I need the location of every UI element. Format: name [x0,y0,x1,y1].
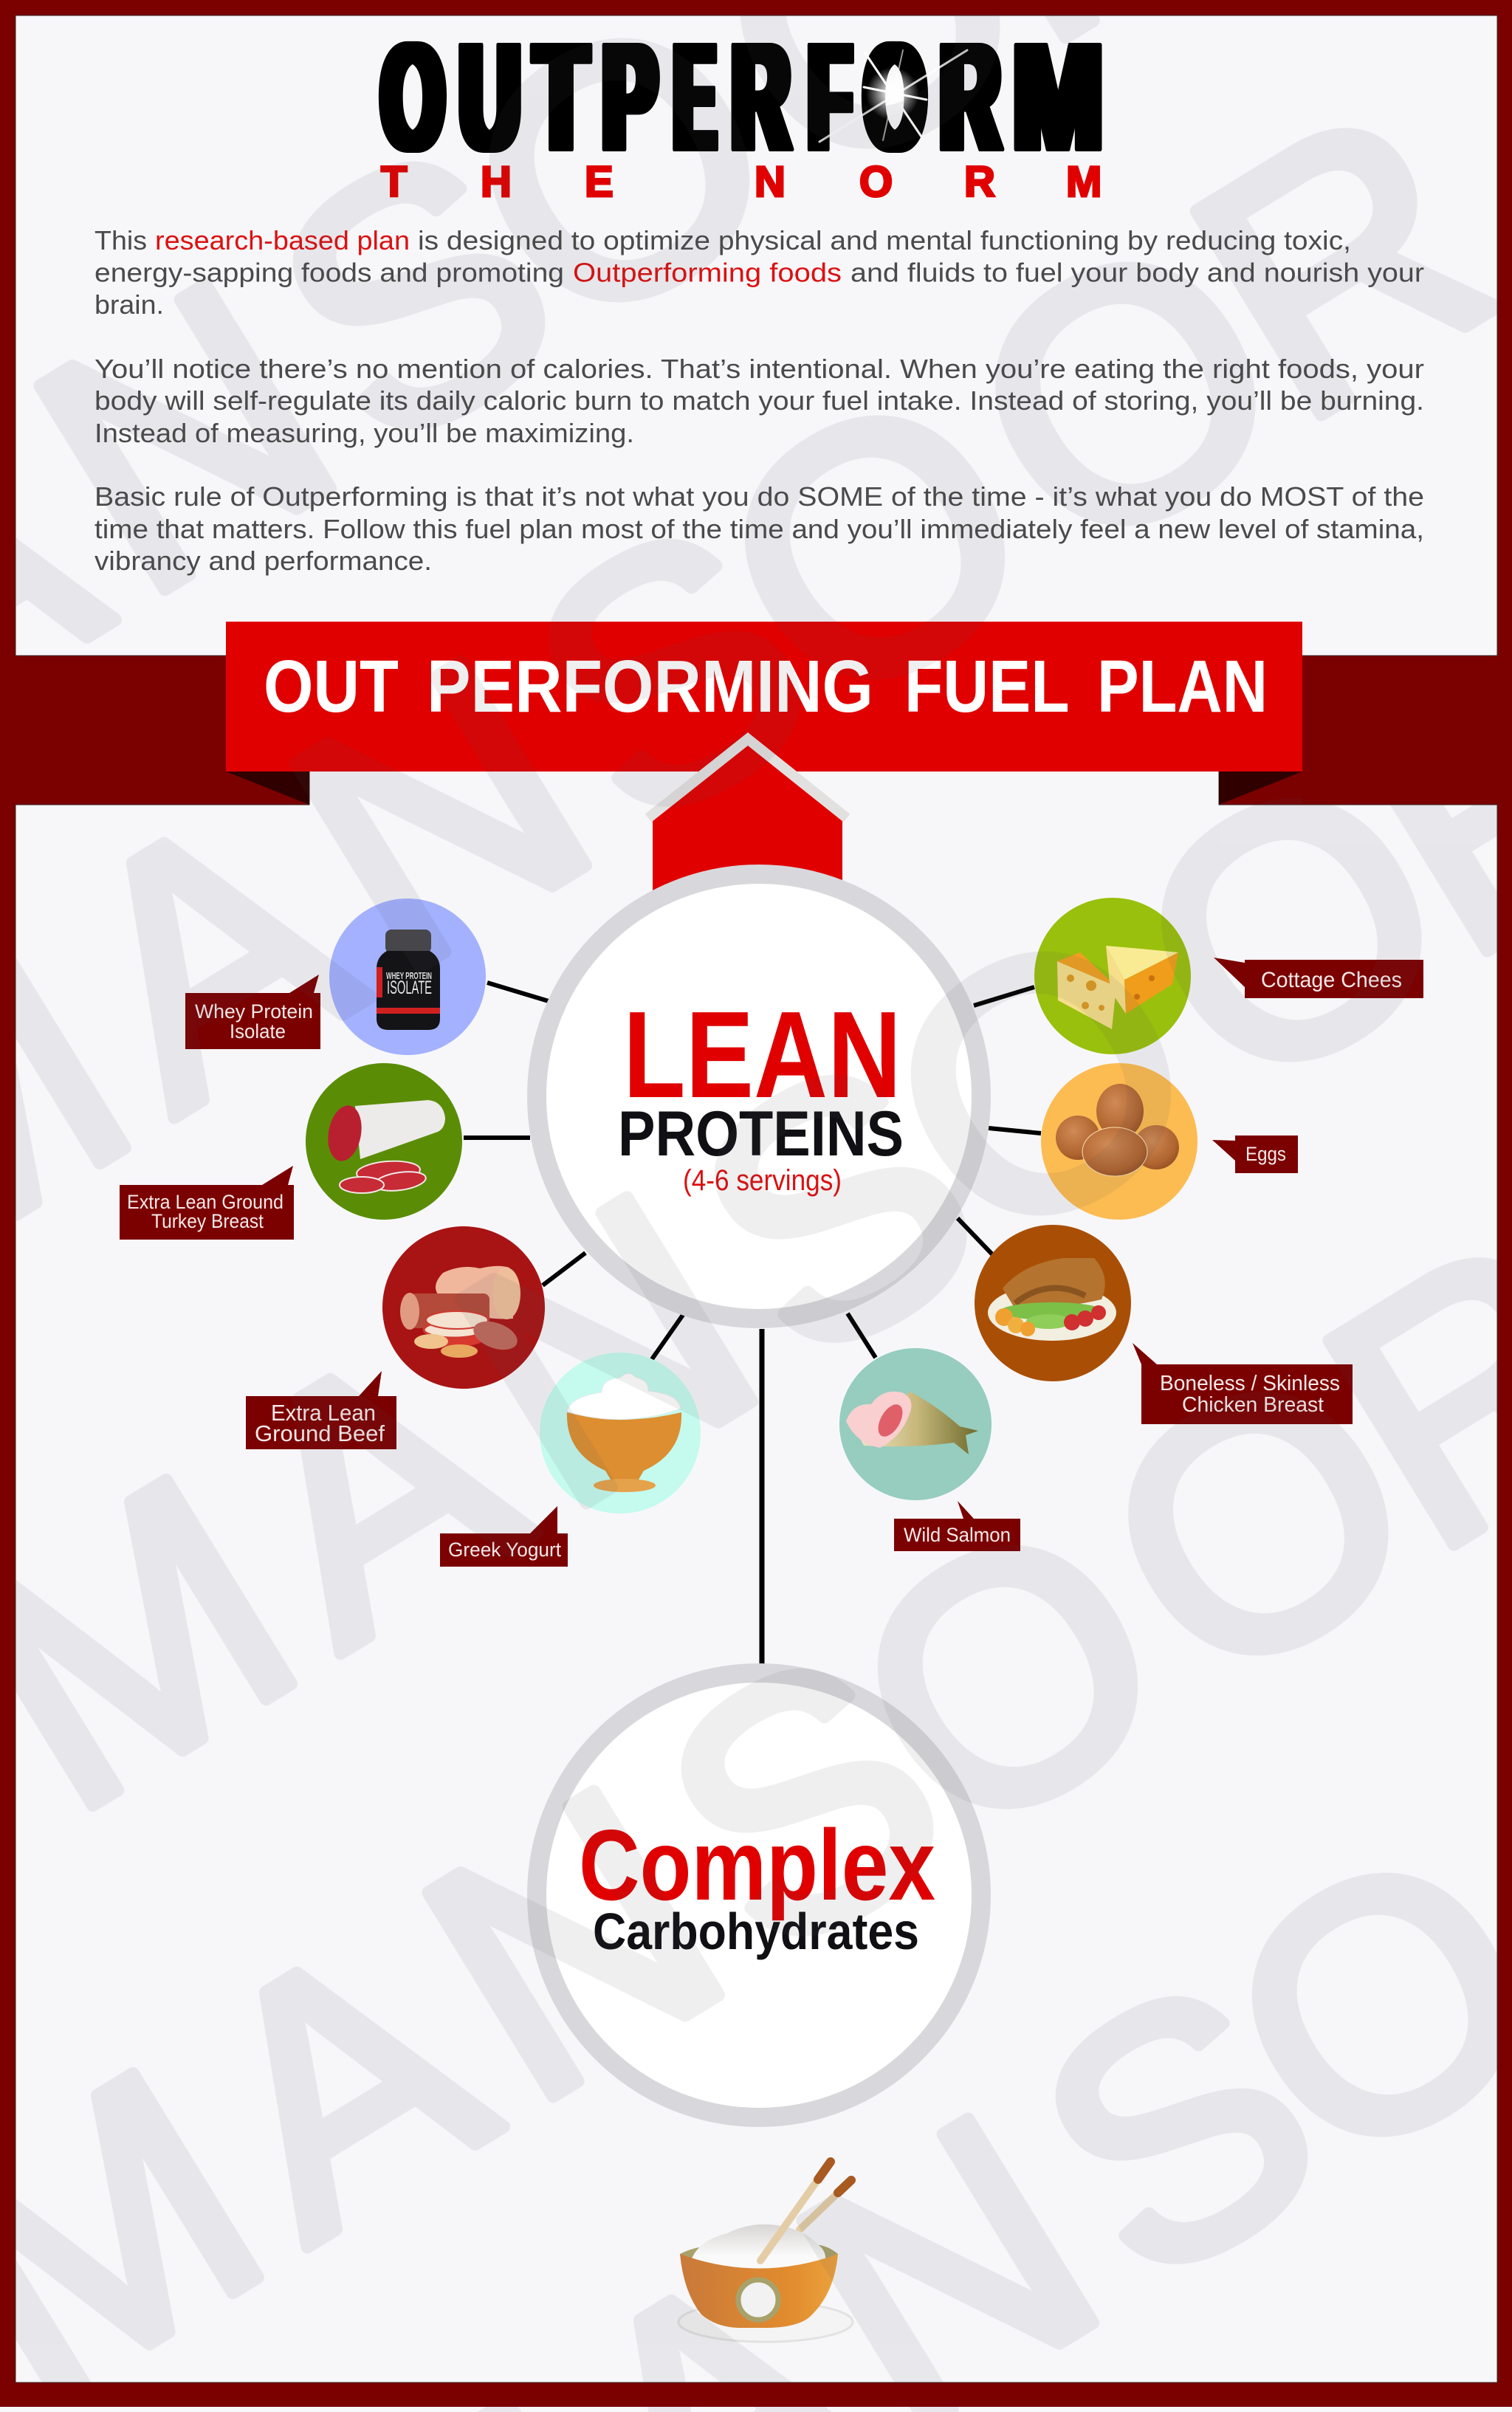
food: eggs [1041,1063,1197,1220]
label: chicken breast: Chicken Breast [1182,1393,1324,1417]
banner title: OUT [264,645,399,728]
label: eggs: Eggs [1245,1143,1286,1165]
food: whey protein jar: ISOLATE [387,977,432,998]
label: greek yogurt: Greek Yogurt [448,1539,561,1561]
label: whey protein: Whey Protein [195,1000,313,1023]
intro paragraph 1: This [94,225,147,255]
lean proteins circle [537,874,981,1319]
label: turkey breast: Turkey Breast [151,1210,264,1232]
banner title: PLAN [1097,645,1268,728]
food: greek yogurt bowl [540,1353,701,1513]
label: wild salmon [894,1501,1020,1551]
lean heading: LEAN [623,986,901,1124]
connector: chicken [958,1218,993,1255]
logo: Outperform: U [460,13,520,182]
banner title: PERFORMING [427,645,873,728]
banner fold: right [1219,772,1302,805]
lower white panel [16,768,1497,2382]
intro paragraph 2 line 3: Instead of measuring, you’ll be maximizing. [94,418,634,448]
connector: beef [543,1253,585,1285]
label: whey protein: Isolate [230,1020,286,1042]
food: cheese [1034,898,1191,1054]
label: cottage cheese [1214,958,1423,998]
logo: Outperform: E [675,13,715,182]
label: cottage cheese: Cottage Chees [1261,968,1402,992]
food: turkey salami [306,1063,462,1220]
complex heading: Complex [579,1809,935,1921]
food: whey protein jar [329,899,486,1055]
logo: Outperform: M [1014,13,1102,182]
logo: Outperform: R [941,13,1000,182]
banner title: FUEL [904,645,1068,728]
intro paragraph 2 line 2: body will self-regulate its daily caloric burn to match your fuel intake. Instead of storing, you’ll be burning. [94,385,1424,416]
arrow highlight [648,739,847,818]
intro paragraph 2: You’ll notice there’s no mention of calories. That’s intentional. When you’re eating the right foods, your [94,354,1424,384]
label: wild salmon: Wild Salmon [904,1524,1011,1546]
intro paragraph 3 line 3: vibrancy and performance. [94,546,432,576]
arrow: banner to lean proteins [653,746,842,908]
logo: The Norm: THE NORM [381,158,1102,206]
logo: Outperform: O [382,13,444,182]
intro paragraph 1 line 2: Outperforming foods [573,257,842,288]
connector: cheese [974,987,1034,1006]
proteins heading: PROTEINS [618,1099,904,1169]
servings note: (4-6 servings) [683,1164,842,1197]
label: whey protein [185,975,320,1049]
connector: yogurt [652,1315,683,1359]
logo: Outperform: F [809,13,850,182]
food: roast chicken plate [975,1225,1131,1381]
upper white panel [16,16,1497,656]
label: eggs [1212,1135,1298,1173]
complex carbohydrates circle [537,1673,981,2117]
logo: Outperform: O [865,13,925,182]
connector: salmon [848,1313,876,1358]
connector: eggs [989,1128,1041,1133]
label: ground beef [246,1371,396,1449]
label: turkey breast [120,1166,294,1240]
banner: fuel plan [226,622,1302,772]
food: rice bowl with chopsticks [678,2162,853,2342]
connector: turkey [464,1135,530,1140]
intro paragraph 1: research-based plan [155,225,410,255]
label: greek yogurt [440,1506,568,1567]
logo: Outperform: P [603,13,656,182]
label: chicken breast: Boneless / Skinless [1160,1372,1340,1395]
banner fold: left [226,772,309,805]
food: whey protein jar: WHEY PROTEIN [386,970,432,981]
intro paragraph 1 line 2: energy-sapping foods and promoting [94,257,564,288]
connector: whey [487,983,549,1001]
intro paragraph 1 line 2: and fluids to fuel your body and nourish your [850,257,1424,288]
logo: Outperform [382,13,1102,182]
intro paragraph 3: Basic rule of Outperforming is that it’s not what you do SOME of the time - it’s what you do MOST of the [94,481,1424,512]
label: chicken breast [1133,1343,1353,1424]
carbohydrates heading: Carbohydrates [593,1903,919,1960]
food: wild salmon [839,1348,992,1500]
bottom page strip [0,2407,1512,2412]
logo: Outperform: T [535,13,587,182]
logo: Outperform: R [732,13,789,182]
intro paragraph 1 line 3: brain. [94,289,164,320]
connector: proteins to carbohydrates [759,1329,765,1665]
intro paragraph 3 line 2: time that matters. Follow this fuel plan most of the time and you’ll immediately feel a new level of stamina, [94,514,1424,544]
label: ground beef: Ground Beef [255,1420,385,1446]
label: ground beef: Extra Lean [271,1400,376,1426]
intro paragraph 1: is designed to optimize physical and mental functioning by reducing toxic, [418,225,1351,255]
label: turkey breast: Extra Lean Ground [127,1191,284,1213]
food: ground beef meats [382,1226,545,1389]
